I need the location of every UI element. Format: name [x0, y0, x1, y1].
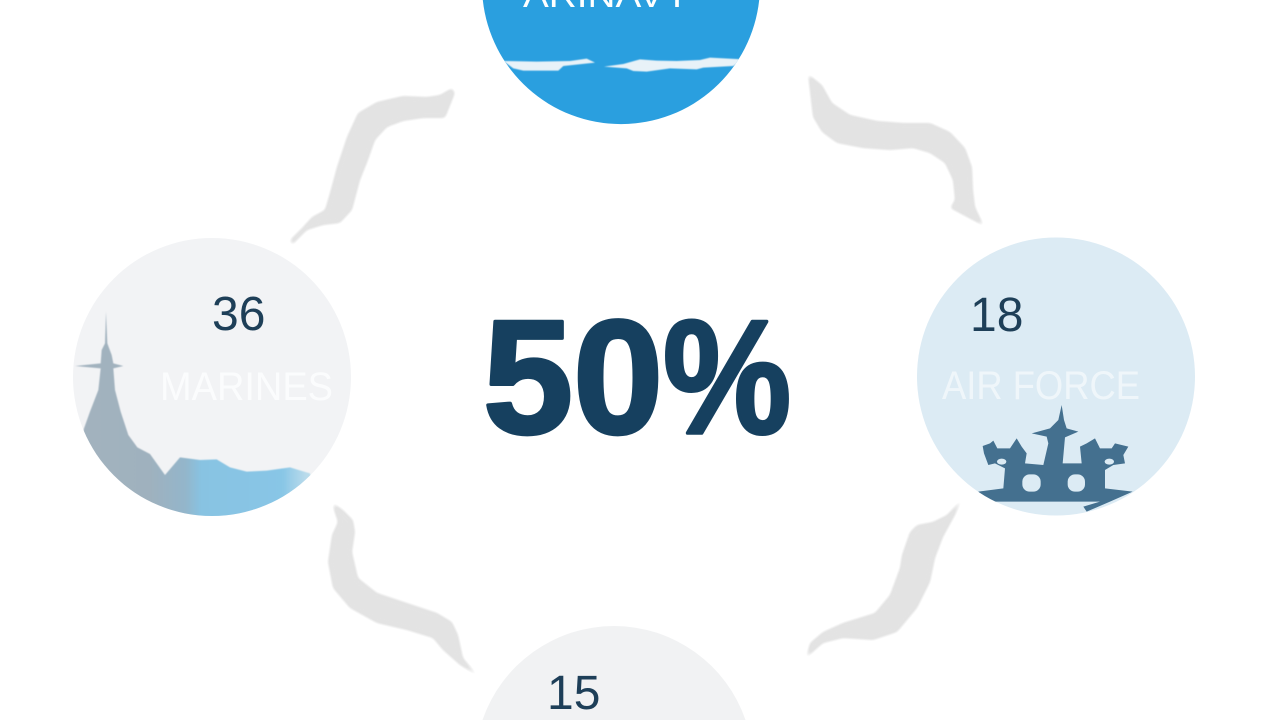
value: 18: 18	[970, 289, 1023, 342]
arrow: air force to bottom	[806, 499, 962, 658]
headline: 50%	[483, 287, 791, 468]
arrow: navy to air force	[808, 74, 984, 226]
circle: marines	[60, 238, 351, 530]
circle: air force	[917, 238, 1195, 516]
label: marines: MARINES	[160, 365, 333, 409]
icon: ship silhouette	[978, 405, 1133, 512]
arrow: bottom to marines	[328, 503, 478, 676]
icon: white waves	[503, 58, 743, 72]
icon: tower and mountains	[76, 314, 311, 516]
circle: navy	[483, 0, 759, 124]
value: 15: 15	[547, 667, 600, 720]
circle: bottom branch	[482, 626, 746, 720]
value: 36: 36	[212, 288, 265, 341]
arrow: marines to navy	[290, 88, 455, 245]
headline: 50%: %	[663, 287, 791, 468]
label: air force: AIR FORCE	[942, 364, 1140, 408]
headline: 50%: 50	[483, 287, 663, 468]
